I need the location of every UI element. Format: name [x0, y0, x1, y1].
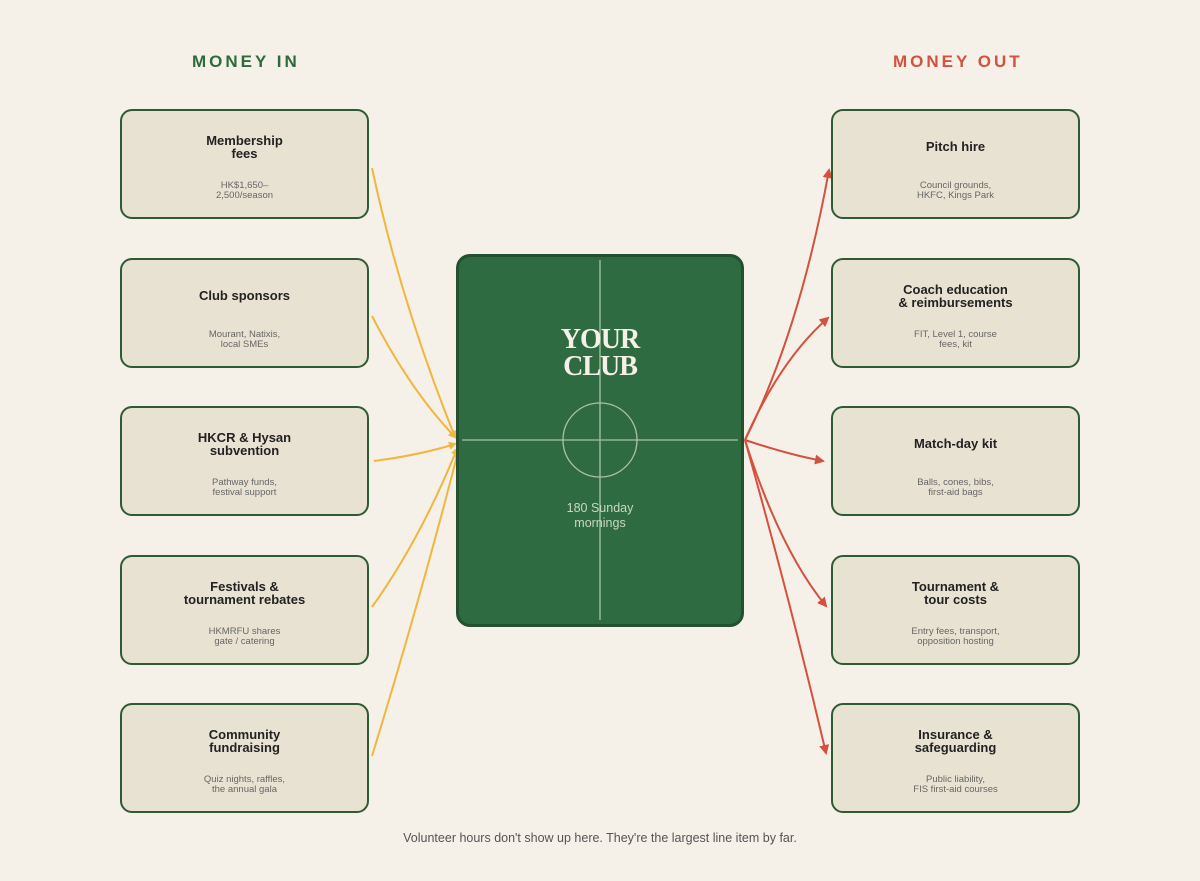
subtitle	[567, 501, 634, 530]
box: hkcr: HKCR & Hysan	[198, 430, 291, 445]
subtitle: mornings	[574, 516, 626, 530]
center panel: your club	[456, 254, 744, 627]
box: club sponsors: local SMEs	[221, 339, 268, 350]
box: match-day kit: Match-day kit	[914, 436, 997, 451]
box: membership fees: fees	[231, 146, 258, 161]
box: insurance: Insurance &	[918, 727, 993, 742]
heading: money out: MONEY OUT	[893, 52, 1023, 71]
box: coach education: & reimbursements	[898, 295, 1013, 310]
box: tournament costs: Tournament &	[912, 579, 999, 594]
box: tournament costs: Entry fees, transport,	[911, 626, 1000, 637]
title: your club	[561, 324, 640, 382]
box: festivals: tournament rebates	[184, 592, 305, 607]
box: hkcr	[120, 406, 369, 516]
box: club sponsors: Mourant, Natixis,	[209, 329, 280, 340]
box: club sponsors: Club sponsors	[199, 288, 290, 303]
box: membership fees: HK$1,650–	[221, 180, 268, 191]
box: pitch hire: HKFC, Kings Park	[917, 190, 994, 201]
box: community fundraising: fundraising	[209, 740, 280, 755]
box: coach education: fees, kit	[939, 339, 972, 350]
box: pitch hire: Council grounds,	[920, 180, 991, 191]
box: pitch hire: Pitch hire	[926, 139, 985, 154]
box: community fundraising: Community	[209, 727, 280, 742]
box: insurance: FIS first-aid courses	[913, 784, 998, 795]
box: community fundraising: the annual gala	[212, 784, 277, 795]
box: tournament costs: opposition hosting	[917, 636, 994, 647]
box: club sponsors	[120, 258, 369, 368]
box: membership fees	[120, 109, 369, 219]
box: match-day kit: first-aid bags	[928, 487, 983, 498]
box: membership fees: Membership	[206, 133, 283, 148]
box: tournament costs	[831, 555, 1080, 665]
box: match-day kit: Balls, cones, bibs,	[917, 477, 994, 488]
box: festivals: HKMRFU shares	[209, 626, 280, 637]
heading: money in: MONEY IN	[192, 52, 300, 71]
title: your club: CLUB	[563, 351, 637, 382]
box: community fundraising: Quiz nights, raffles,	[204, 774, 285, 785]
box: pitch hire	[831, 109, 1080, 219]
box: hkcr: subvention	[210, 443, 279, 458]
box: tournament costs: tour costs	[924, 592, 987, 607]
box: coach education: FIT, Level 1, course	[914, 329, 997, 340]
title: your club: YOUR	[561, 324, 639, 355]
box: membership fees: 2,500/season	[216, 190, 273, 201]
box: coach education: Coach education	[903, 282, 1008, 297]
footnote: Volunteer hours don't show up here. They're the largest line item by far.	[403, 831, 797, 845]
box: insurance: safeguarding	[915, 740, 996, 755]
box: coach education	[831, 258, 1080, 368]
box: hkcr: Pathway funds,	[212, 477, 277, 488]
box: community fundraising	[120, 703, 369, 813]
box: festivals: gate / catering	[214, 636, 275, 647]
box: hkcr: festival support	[213, 487, 276, 498]
box: insurance: Public liability,	[926, 774, 985, 785]
box: insurance	[831, 703, 1080, 813]
box: festivals	[120, 555, 369, 665]
box: match-day kit	[831, 406, 1080, 516]
box: festivals: Festivals &	[210, 579, 279, 594]
subtitle: 180 Sunday	[567, 501, 633, 515]
